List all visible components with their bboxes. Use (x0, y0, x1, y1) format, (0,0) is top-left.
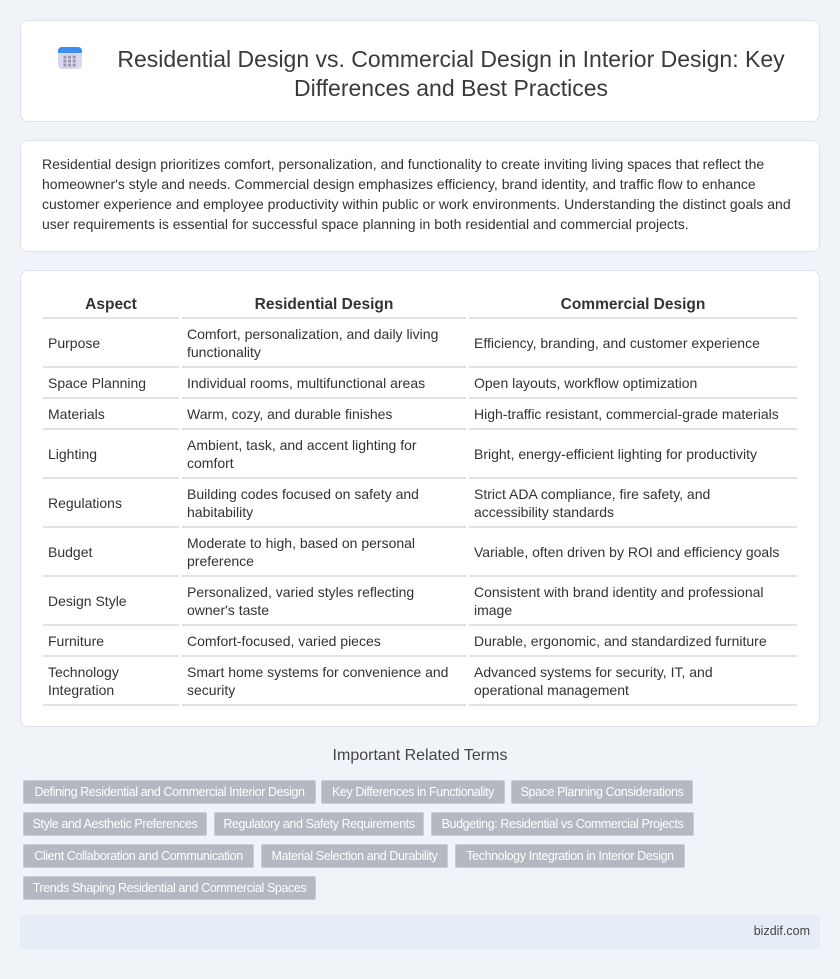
comparison table: Efficiency, branding, and customer experience (474, 334, 760, 350)
footer (20, 915, 820, 949)
related terms tags: Trends Shaping Residential and Commercial Spaces (33, 881, 306, 895)
comparison table: Residential Design (255, 296, 393, 313)
comparison table: Durable, ergonomic, and standardized furniture (474, 632, 767, 648)
related terms tags: Defining Residential and Commercial Interior Design (34, 785, 304, 799)
related terms tags: Space Planning Considerations (521, 785, 683, 799)
comparison table: Variable, often driven by ROI and efficiency goals (474, 544, 779, 560)
comparison table: Individual rooms, multifunctional areas (187, 374, 425, 390)
related terms tags (23, 780, 694, 900)
header card (20, 20, 820, 122)
icon: calendar (58, 47, 82, 69)
comparison table: Building codes focused on safety and habitability (187, 486, 419, 520)
comparison table: Personalized, varied styles reflecting owner's taste (187, 584, 414, 618)
related terms tags: Client Collaboration and Communication (34, 849, 243, 863)
related terms tags: Regulatory and Safety Requirements (223, 817, 415, 831)
related terms heading: Important Related Terms (333, 747, 507, 764)
comparison table card (20, 270, 820, 727)
icon: calendar: ■■■ ■■■ ■■■ (63, 55, 77, 69)
comparison table: Aspect (85, 296, 137, 313)
comparison table: Space Planning (48, 374, 146, 390)
comparison table: Bright, energy-efficient lighting for productivity (474, 446, 757, 462)
comparison table: Ambient, task, and accent lighting for comfort (187, 436, 417, 470)
intro text card: Residential design prioritizes comfort, personalization, and functionality to create inviting living spaces that reflect the homeowner's style and needs. Commercial design emphasizes efficiency, brand identity, and traffic flow to enhance customer experience and employee productivity within public or work environments. Understanding the distinct goals and user requirements is essential for successful space planning in both residential and commercial projects. (42, 156, 791, 232)
footer: bizdif.com (754, 924, 810, 938)
comparison table: Strict ADA compliance, fire safety, and accessibility standards (474, 486, 710, 520)
related terms tags: Material Selection and Durability (271, 849, 438, 863)
comparison table: Comfort, personalization, and daily living functionality (187, 326, 438, 360)
comparison table: Lighting (48, 446, 97, 462)
related terms tags: Budgeting: Residential vs Commercial Projects (442, 817, 683, 831)
comparison table: Furniture (48, 632, 104, 648)
comparison table: Purpose (48, 334, 100, 350)
comparison table: High-traffic resistant, commercial-grade materials (474, 406, 779, 422)
comparison table: Warm, cozy, and durable finishes (187, 406, 392, 422)
comparison table: Moderate to high, based on personal preference (187, 534, 415, 568)
related terms tags: Key Differences in Functionality (332, 785, 494, 799)
comparison table: Design Style (48, 592, 127, 608)
comparison table: Smart home systems for convenience and security (187, 664, 448, 698)
comparison table: Comfort-focused, varied pieces (187, 632, 381, 648)
intro text card (20, 140, 820, 252)
comparison table: Materials (48, 406, 105, 422)
comparison table (43, 296, 797, 706)
comparison table: Regulations (48, 494, 122, 510)
comparison table: Commercial Design (561, 296, 705, 313)
related terms tags: Style and Aesthetic Preferences (33, 817, 197, 831)
comparison table: Open layouts, workflow optimization (474, 374, 697, 390)
comparison table: Budget (48, 544, 92, 560)
comparison table: Consistent with brand identity and professional image (474, 584, 764, 618)
comparison table: Advanced systems for security, IT, and operational management (474, 664, 713, 698)
related terms tags: Technology Integration in Interior Design (466, 849, 674, 863)
comparison table: Technology Integration (48, 664, 119, 698)
title: Residential Design vs. Commercial Design in Interior Design: Key Differences and Best Practices (117, 46, 785, 101)
